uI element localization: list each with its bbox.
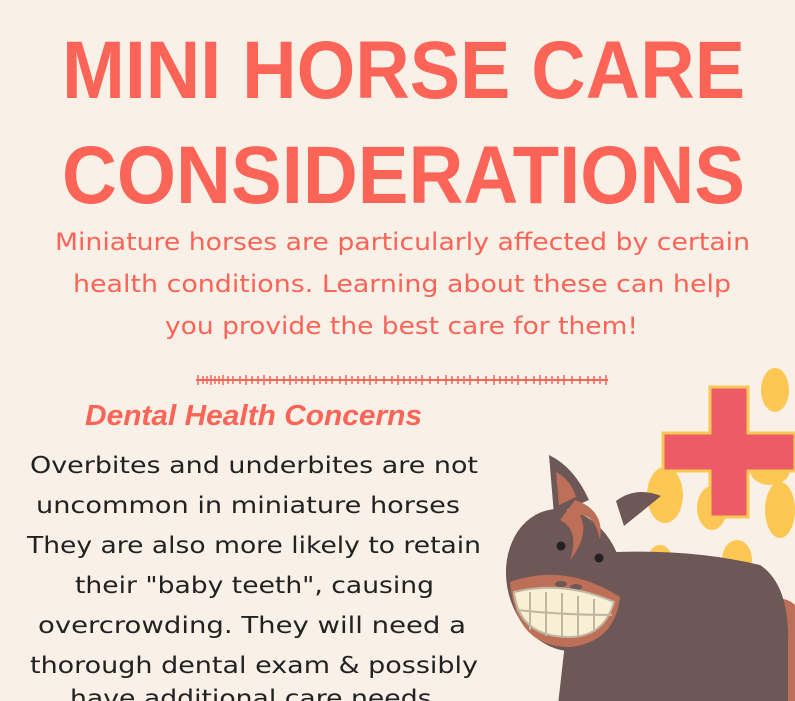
- body text: Overbites and underbites are not: [30, 453, 478, 479]
- body text: their "baby teeth", causing: [75, 573, 434, 599]
- subtitle: health conditions. Learning about these can help: [73, 270, 731, 298]
- title: MINI HORSE CARE: [62, 25, 745, 116]
- subtitle: you provide the best care for them!: [165, 312, 638, 340]
- illustration: grinning horse: [490, 455, 795, 701]
- icon: medical cross: [663, 387, 795, 517]
- yellow spots: [647, 368, 795, 580]
- title: [62, 25, 745, 221]
- heading: Dental Health Concerns: Dental Health Concerns: [85, 400, 422, 432]
- subtitle: [55, 228, 750, 340]
- body text: uncommon in miniature horses: [36, 493, 460, 519]
- title: CONSIDERATIONS: [62, 130, 745, 221]
- subtitle: Miniature horses are particularly affected by certain: [55, 228, 750, 256]
- body text: [26, 453, 481, 701]
- body text: overcrowding. They will need a: [38, 613, 466, 639]
- body text: thorough dental exam & possibly: [30, 653, 478, 679]
- body text: They are also more likely to retain: [26, 533, 481, 559]
- divider: [196, 375, 608, 385]
